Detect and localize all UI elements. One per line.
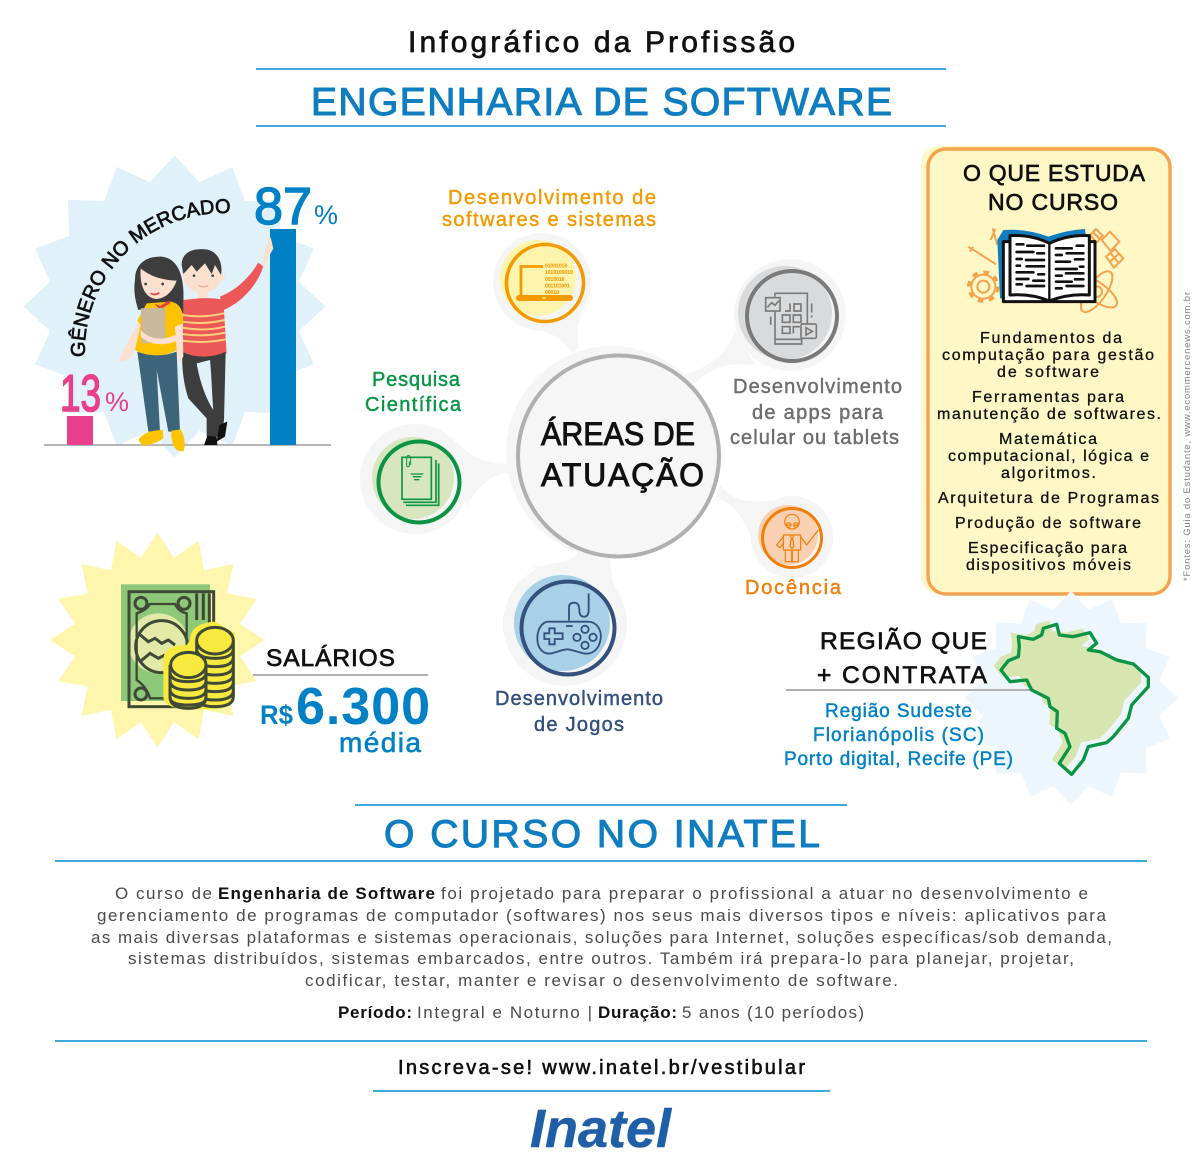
list of subjects: dispositivos móveis (966, 557, 1131, 574)
region list: Porto digital, Recife (PE) (784, 749, 1013, 770)
title (256, 26, 946, 126)
list of subjects: algoritmos. (1001, 465, 1096, 482)
icon: documents (402, 455, 439, 505)
list of subjects: Ferramentas para (972, 389, 1124, 406)
list of subjects: Arquitetura de Programas (938, 490, 1159, 507)
bar: women 13%: 13 (60, 365, 101, 423)
bar: men 87%: % (314, 200, 338, 230)
list of subjects: Produção de software (955, 515, 1141, 532)
text block: period and duration: 5 anos (10 períodos) (682, 1003, 864, 1022)
region list: Florianópolis (SC) (813, 725, 984, 746)
node: scientific research: Pesquisa (372, 369, 461, 391)
star background: salaries (50, 532, 265, 748)
title: Infográfico da Profissão (408, 26, 795, 59)
text block: course description: Engenharia de Software (218, 884, 435, 903)
bar: men 87%: 87 (254, 178, 312, 236)
connectors and halos (360, 233, 846, 686)
heading: region: REGIÃO QUE (820, 628, 987, 655)
icon: teacher (777, 514, 818, 562)
list of subjects: de software (997, 364, 1099, 381)
panel: hiring region (784, 591, 1178, 805)
text block: course description: codificar, testar, manter e revisar o desenvolvimento de software. (305, 971, 898, 990)
text block: course description: foi projetado para preparar o profissional a atuar no desenvolvimento e (441, 884, 1088, 903)
heading: O QUE ESTUDA (963, 160, 1146, 186)
list of subjects: Fundamentos da (980, 330, 1122, 347)
node: software development (442, 187, 656, 322)
node: software development: Desenvolvimento de (448, 187, 656, 209)
node: apps (730, 266, 902, 449)
text block: course description: gerenciamento de programas de computador (softwares) nos seus mais diversos tipos e níveis: aplicativos para (97, 906, 1107, 925)
bar: women 13%: % (105, 387, 129, 417)
icon: laptop: 00010 (545, 290, 559, 296)
icon: laptop: 01001010 (545, 264, 567, 270)
heading: region (786, 628, 1032, 690)
icon: mobile apps (766, 293, 816, 344)
central circle: ÁREAS DE (541, 416, 695, 452)
icon: game controller (537, 593, 601, 654)
panel: salaries (50, 532, 430, 758)
node: scientific research: Científica (365, 394, 462, 416)
star background: gender (24, 156, 326, 458)
list of subjects: computação para gestão (942, 347, 1154, 364)
icon: couple (119, 237, 273, 452)
text block: period and duration: Integral e Noturno | (417, 1003, 592, 1022)
panel: what is studied in the course (921, 146, 1170, 594)
icon: banknote and coins (121, 584, 235, 709)
text block: course description: O curso de (115, 884, 212, 903)
node: games: de Jogos (534, 714, 624, 736)
icon: laptop: 001101001 (545, 284, 570, 290)
node: games (495, 575, 663, 736)
logo: Inatel: Inatel (530, 1099, 672, 1159)
node: scientific research (365, 369, 462, 522)
salary value: 6.300 (296, 678, 430, 736)
source credit: *Fontes: Guia do Estudante, www.ecommercenews.com.br (1182, 292, 1193, 581)
node: teaching (745, 505, 842, 599)
list of subjects: computacional, lógica e (948, 448, 1149, 465)
node: apps: celular ou tablets (730, 427, 899, 449)
curved heading: gender: GÊNERO NO MERCADO (68, 198, 230, 356)
text block: period and duration: Período: (338, 1003, 412, 1022)
text block: period and duration: Duração: (598, 1003, 677, 1022)
text block: course description: sistemas distribuídos, sistemas embarcados, entre outros. Também irá prepara-lo para planejar, projetar, (128, 949, 1074, 968)
salary value: R$ (260, 700, 293, 730)
region list (784, 701, 1013, 770)
text block: course description: as mais diversas plataformas e sistemas operacionais, soluções para Internet, soluções específicas/sob demanda, (91, 928, 1112, 947)
node: teaching: Docência (745, 577, 842, 599)
region list: Região Sudeste (825, 701, 972, 722)
heading (963, 160, 1146, 215)
bar: women 13% (60, 365, 129, 445)
star background: region (964, 591, 1178, 805)
text block: course description (91, 884, 1112, 990)
heading: the course at Inatel: O CURSO NO INATEL (384, 813, 820, 856)
title: ENGENHARIA DE SOFTWARE (311, 81, 892, 124)
list of subjects: manutenção de softwares. (937, 406, 1161, 423)
call to action: Inscreva-se! www.inatel.br/vestibular (398, 1057, 805, 1079)
panel: areas of practice (360, 187, 902, 736)
salary value (260, 678, 430, 758)
icon: map of Brazil (994, 620, 1148, 774)
icon: laptop: 0010010 (545, 277, 565, 283)
node: apps: Desenvolvimento (733, 376, 902, 398)
icon: open book with science symbols (968, 228, 1123, 317)
list of subjects: Especificação para (968, 540, 1127, 557)
heading: salaries: SALÁRIOS (266, 645, 395, 672)
axis line (44, 444, 331, 446)
node: games: Desenvolvimento (495, 688, 663, 710)
text block: period and duration (338, 1003, 864, 1022)
panel: gender in the market (24, 156, 338, 458)
bar: men 87% (254, 178, 338, 445)
salary value: média (339, 727, 421, 758)
icon: laptop: 1010100010 (545, 270, 573, 276)
node: apps: de apps para (752, 402, 884, 424)
heading: region: + CONTRATA (817, 662, 988, 689)
central circle (518, 356, 719, 556)
heading: NO CURSO (988, 189, 1118, 215)
list of subjects: Matemática (999, 431, 1097, 448)
icon: laptop (516, 264, 573, 301)
central circle: ATUAÇÃO (541, 457, 704, 493)
list of subjects (937, 330, 1161, 574)
node: software development: softwares e sistemas (442, 209, 656, 231)
